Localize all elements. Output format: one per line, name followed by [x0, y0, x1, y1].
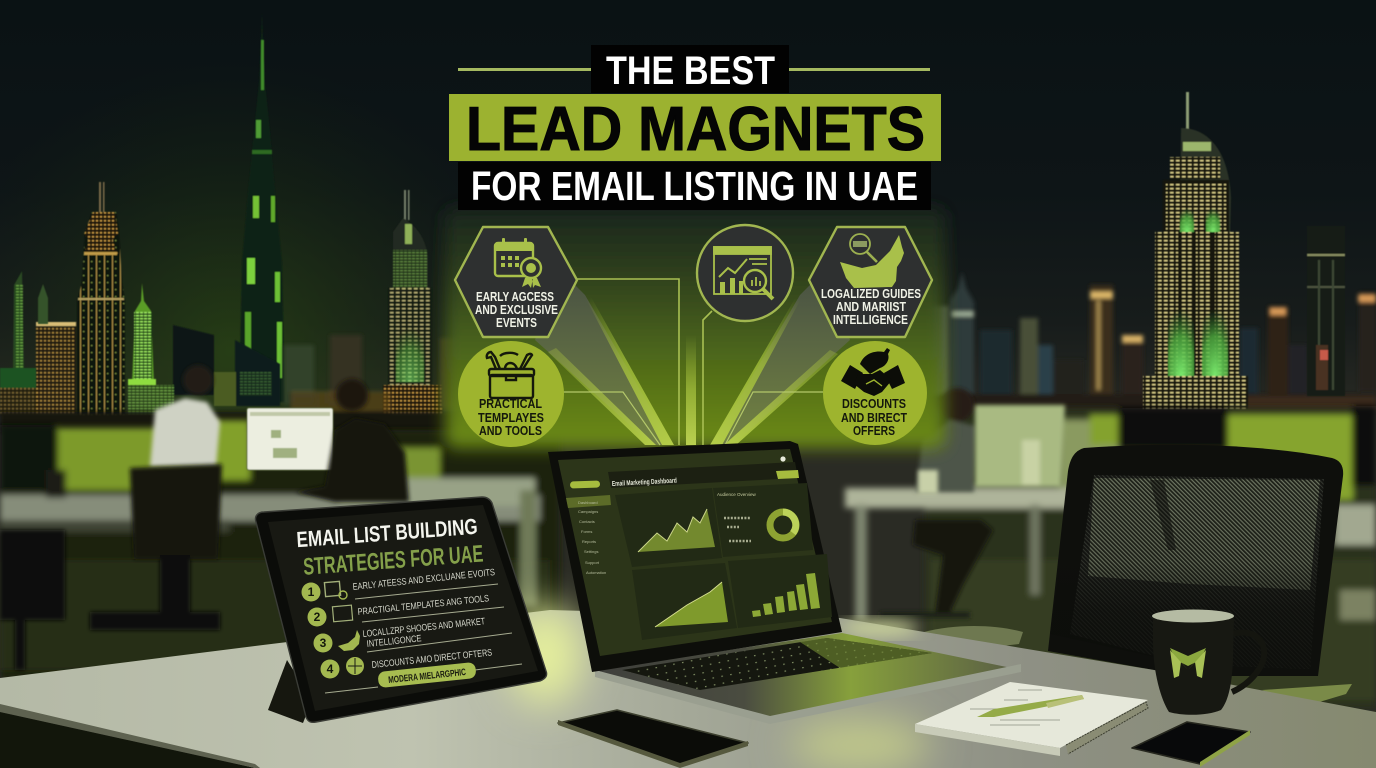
connector: top left hexagon — [577, 279, 679, 445]
foreground desk — [0, 605, 1376, 768]
dashboard sidebar: Settings — [584, 549, 598, 554]
tablet dividers — [325, 584, 522, 693]
connector: left circle — [563, 392, 660, 445]
tablet heading: STRATEGIES FOR UAE — [302, 540, 484, 581]
icon: calendar with ribbon — [495, 238, 541, 288]
tablet list numbers: 2 — [314, 610, 321, 624]
pen — [977, 695, 1084, 717]
beam: right bright band upper — [710, 295, 802, 445]
title line: LEAD MAGNETS: LEAD MAGNETS — [466, 95, 925, 164]
icon: toolbox — [487, 352, 534, 398]
beam: left bright band lower — [548, 348, 656, 445]
hexagon: localized guides and market intelligence — [809, 227, 932, 337]
dashboard panel: bar chart — [728, 554, 832, 628]
mug logo — [1170, 648, 1206, 678]
monitor: back of right desk screen — [918, 405, 1065, 494]
tablet list text: EARLY ATEESS AND EXCLUANE EVOITS — [352, 567, 496, 593]
dashboard sidebar: Automation — [586, 570, 606, 575]
beam: central strip — [686, 335, 696, 445]
label: practical templates — [478, 396, 544, 438]
blurred skyline lights centre-left — [0, 335, 474, 432]
label: discounts — [841, 396, 907, 438]
dashboard header — [608, 456, 799, 488]
mug body — [1153, 616, 1234, 715]
light beams and connector lines — [535, 270, 850, 445]
label: discounts: OFFERS — [853, 423, 895, 438]
notebook writing — [970, 690, 1060, 725]
dashboard panel: area chart — [632, 563, 737, 640]
laptop screen — [558, 449, 832, 656]
circle: discounts and direct offers — [823, 341, 927, 445]
tablet list text: PRACTIGAL TEMPLATES ANG TOOLS — [357, 593, 490, 618]
buildings: small left towers — [0, 271, 280, 416]
desk glow: lime reflection — [507, 605, 930, 768]
label: practical templates: AND TOOLS — [479, 423, 542, 438]
hexagon: early access and exclusive events — [455, 227, 577, 337]
building: golden tower left — [36, 182, 125, 416]
armrest: chair left — [924, 626, 1023, 648]
beam: right grey wedge — [712, 270, 850, 445]
label: early access: EVENTS — [496, 315, 537, 330]
dashboard sidebar: Reports — [582, 539, 596, 544]
tablet list numbers: 4 — [327, 662, 334, 676]
tablet list text — [352, 567, 496, 671]
dashboard sidebar: Dashboard — [578, 500, 598, 505]
label: practical templates: PRACTICAL — [479, 396, 542, 411]
office chair: left background — [0, 464, 222, 670]
dashboard sidebar — [566, 480, 611, 575]
label: early access: AND EXCLUSIVE — [475, 302, 558, 317]
blurred distant skyline right — [900, 272, 1376, 412]
tablet heading: EMAIL LIST BUILDING — [296, 514, 478, 552]
dashboard sidebar: Forms — [581, 529, 592, 534]
tablet footer pill: MODERA MIELARGPHIC — [388, 667, 467, 686]
dashboard sidebar: Campaigns — [578, 509, 598, 514]
label: practical templates: TEMPLAYES — [478, 410, 544, 425]
laptop base — [595, 633, 1021, 722]
label: discounts: AND BIRECT — [841, 410, 907, 425]
tablet list numbers: 1 — [308, 585, 315, 599]
person: dark suit colleague — [295, 379, 409, 502]
tablet list icons — [324, 581, 364, 675]
label: early access: EARLY AGCESS — [476, 289, 554, 304]
tablet heading — [296, 513, 484, 581]
tablet — [255, 497, 547, 723]
title line: THE BEST: THE BEST — [606, 49, 775, 93]
laptop keyboard — [622, 638, 932, 690]
green glow panel behind icons — [445, 208, 945, 448]
office chair: mesh back foreground — [1048, 445, 1343, 676]
connector: right circle — [725, 392, 823, 445]
tablet footer pill — [377, 662, 477, 688]
title block — [449, 45, 941, 210]
office scene left — [0, 420, 560, 680]
tablet list text: INTELLIGONCE — [366, 633, 422, 650]
dashboard panel: donut — [713, 483, 813, 557]
office scene right — [845, 406, 1376, 708]
laptop lid — [548, 441, 842, 672]
dashboard panel: line chart — [615, 488, 722, 567]
smartphone: left — [558, 710, 748, 768]
tablet stand — [268, 660, 312, 723]
dashboard header: Email Marketing Dashboard — [612, 478, 677, 488]
label: localized guides: INTELLIGENCE — [833, 312, 908, 327]
person: woman at right desk — [880, 388, 993, 618]
notebook with pen — [915, 682, 1148, 756]
icon: UAE map with magnifier — [840, 234, 904, 288]
smartphone: right — [1132, 722, 1250, 767]
person: white shirt colleague — [150, 365, 220, 467]
icon: browser chart with magnifier — [714, 247, 773, 299]
building: Burj Khalifa — [239, 12, 285, 402]
connector: top circle — [703, 311, 712, 445]
title line: FOR EMAIL LISTING IN UAE: FOR EMAIL LISTING IN UAE — [471, 163, 918, 209]
label: discounts: DISCOUNTS — [842, 396, 906, 411]
label: localized guides: LOGALIZED GUIDES — [821, 286, 921, 301]
title rule — [458, 68, 930, 71]
label: early access — [475, 289, 558, 330]
circle: analytics — [697, 225, 793, 321]
building: tower centre-left — [383, 190, 443, 415]
mug handle — [1232, 633, 1264, 692]
beam: left bright band upper — [585, 295, 674, 445]
dashboard sidebar: Contacts — [579, 519, 595, 524]
armrest: chair right — [1262, 684, 1352, 706]
circle: practical templates and tools — [458, 341, 564, 447]
tablet list text: DISCOUNTS AMO DIRECT OFTERS — [371, 647, 493, 671]
laptop — [548, 441, 1021, 724]
mug rim — [1152, 610, 1234, 622]
monitor: left desk — [247, 408, 333, 470]
dashboard panel: donut: Audience Overview — [717, 492, 757, 497]
tablet list numbers — [302, 582, 340, 678]
coffee mug with logo — [1152, 610, 1264, 715]
building: dark tower far right — [1307, 226, 1345, 396]
beam: right bright band lower — [724, 350, 838, 445]
beam: left grey wedge — [535, 270, 672, 445]
icon: tag and handshake — [841, 348, 905, 396]
tablet list numbers: 3 — [320, 636, 327, 650]
label: localized guides — [821, 286, 921, 327]
tablet screen — [268, 505, 538, 711]
building: Address tower right — [1143, 92, 1248, 409]
tablet list text: LOCALLZRP SHOOES AND MARKET — [362, 616, 486, 640]
tablet body — [255, 497, 547, 722]
dashboard sidebar: Support — [585, 560, 600, 565]
label: localized guides: AND MARIIST — [836, 299, 906, 314]
